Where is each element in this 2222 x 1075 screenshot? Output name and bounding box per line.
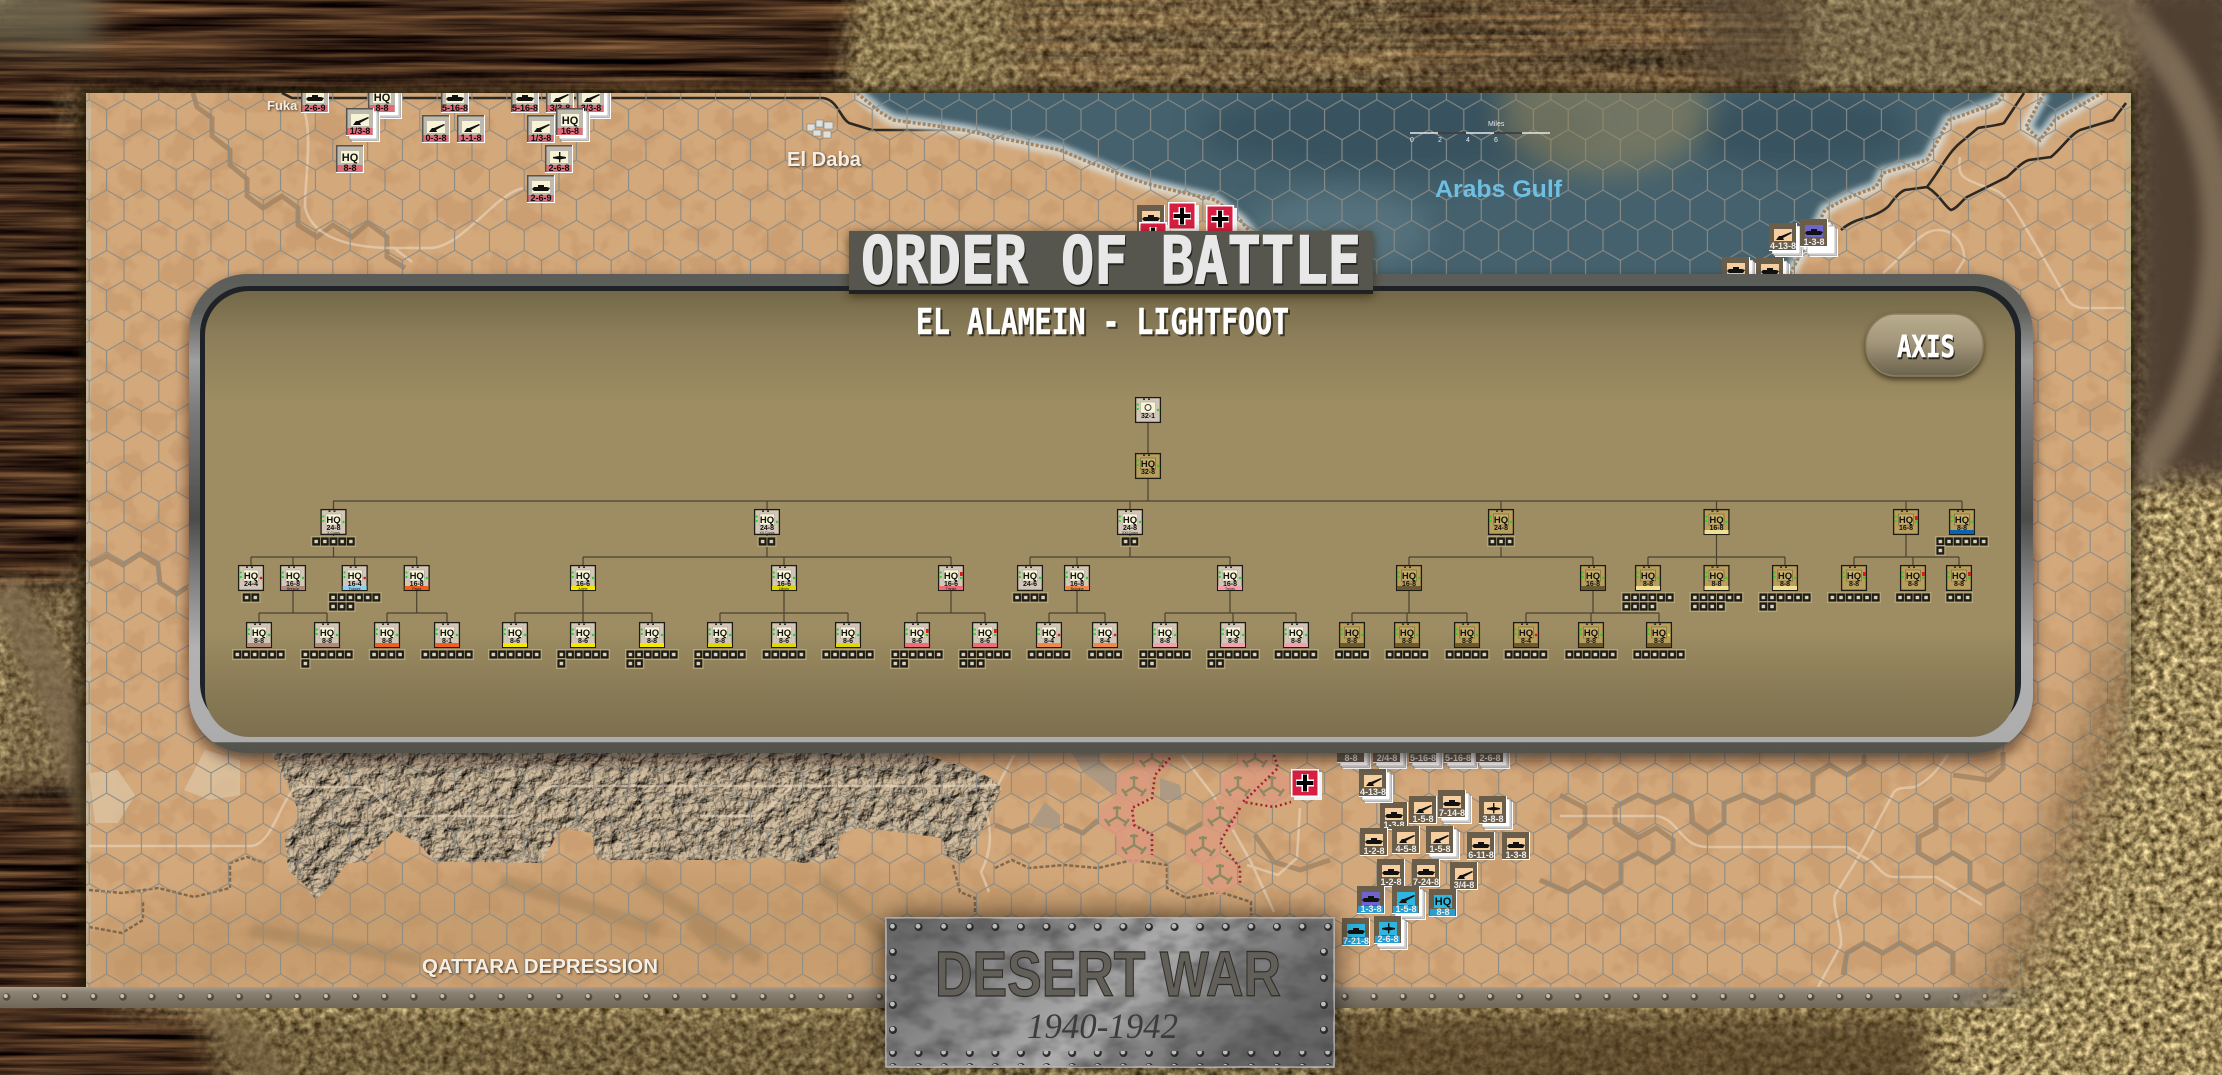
164th division: 16-8 xyxy=(1709,525,1724,532)
rough terrain xyxy=(270,750,1002,900)
Bologna division xyxy=(1065,566,1089,591)
map counters: front line group: 1-3-8 xyxy=(1505,850,1527,860)
Ariete regiment: 8-8 xyxy=(647,638,657,645)
X Corps: 24-8 xyxy=(326,525,341,532)
15th Panzer regiment xyxy=(1444,623,1490,660)
plaque title: DESERT WAR xyxy=(935,938,1281,1010)
map counters: front line group: 8-8 xyxy=(1344,753,1358,763)
map counters: front line group: 1-2-8 xyxy=(1380,877,1402,887)
Pavia regiment xyxy=(420,623,474,660)
164th regiment xyxy=(1621,566,1675,612)
map counters: north-west group: 1-1-8 xyxy=(460,133,482,143)
XX Corps xyxy=(755,510,779,547)
plaque rivets xyxy=(886,920,1334,1065)
map counters: front line group xyxy=(1291,735,1530,950)
Littorio division: HQ xyxy=(777,571,791,582)
Folgore division: Folgore xyxy=(349,587,361,591)
164th regiment xyxy=(1758,566,1812,612)
Trento regiment: 8-8 xyxy=(1160,638,1170,645)
Littorio division xyxy=(772,566,796,591)
Bologna regiment xyxy=(1026,623,1072,660)
map counters: front line group: 7-24-8 xyxy=(1413,877,1439,887)
Folgore division: 16-4 xyxy=(348,581,362,588)
164th division xyxy=(1704,510,1729,534)
Ariete regiment: HQ xyxy=(508,628,522,639)
X Corps xyxy=(311,510,356,547)
Bologna regiment: HQ xyxy=(1098,628,1112,639)
Trento division: HQ xyxy=(1223,571,1237,582)
Pavia regiment xyxy=(369,623,405,660)
X Corps: HQ xyxy=(326,515,341,526)
Littorio regiment: HQ xyxy=(777,628,791,639)
15th Panzer division xyxy=(1397,566,1421,590)
Brescia division: Brescia xyxy=(287,587,299,591)
depression sand xyxy=(86,872,1130,982)
Littorio regiment: HQ xyxy=(713,628,727,639)
German Panzer corps: HQ xyxy=(1494,515,1508,526)
dark escarpment edges xyxy=(89,857,1251,933)
90th Light division: HQ xyxy=(1899,515,1913,526)
map counters: north-east group: 1-3-8 xyxy=(1803,237,1825,247)
XXI Corps unit: HQ xyxy=(1023,571,1037,582)
map counters: front line group: 7-21-8 xyxy=(1343,936,1369,946)
15th Panzer regiment xyxy=(1384,623,1430,660)
90th Light regiment: 8-8 xyxy=(1908,581,1918,588)
map drop shadow xyxy=(78,88,2136,993)
Ariete division: HQ xyxy=(576,571,590,582)
Trieste regiment: 8-6 xyxy=(912,638,922,645)
Ariete regiment: 8-6 xyxy=(578,638,588,645)
map counters: north-west group: 2-6-9 xyxy=(304,103,326,113)
Littorio division: 16-6 xyxy=(777,581,791,588)
Folgore division: HQ xyxy=(348,571,362,582)
Trieste regiment xyxy=(958,623,1012,669)
XXI Corps: 24-8 xyxy=(1123,525,1137,532)
map counters: north-west group: 3/3-8 xyxy=(550,103,570,113)
Trieste division: HQ xyxy=(944,571,958,582)
roads xyxy=(282,93,2126,230)
Brescia regiment: 8-8 xyxy=(322,638,332,645)
21st Panzer division: HQ xyxy=(1586,571,1600,582)
map counters: north-west group: 0-3-8 xyxy=(425,133,447,143)
Trento regiment: HQ xyxy=(1226,628,1240,639)
Trento regiment xyxy=(1138,623,1192,669)
map counters: front line group: 4-5-8 xyxy=(1395,844,1417,854)
map counters: front line group: 1-5-8 xyxy=(1395,904,1417,914)
map counters: front line group: 3/4-8 xyxy=(1454,880,1474,890)
map counters: north-west group: 8-8 xyxy=(343,163,357,173)
Pavia division: HQ xyxy=(410,571,424,582)
Bologna division: Bologna xyxy=(1071,587,1083,591)
Brescia regiment: HQ xyxy=(252,628,266,639)
15th Panzer regiment: HQ xyxy=(1400,628,1414,639)
button: Axis: AXIS xyxy=(1897,330,1955,365)
scale bar: 2 xyxy=(1438,137,1442,144)
map counters: front line group: 1-2-8 xyxy=(1363,846,1385,856)
Pavia division: Pavia xyxy=(412,587,421,591)
Littorio regiment: 8-6 xyxy=(779,638,789,645)
90th Light regiment: 8-8 xyxy=(1954,581,1964,588)
desert tracks xyxy=(89,113,2126,987)
panel metal frame xyxy=(189,274,2033,753)
21st Panzer division: 16-8 xyxy=(1586,581,1600,588)
XXI Corps: HQ xyxy=(1123,515,1137,526)
Littorio division: Littorio xyxy=(779,587,789,591)
21st Panzer regiment xyxy=(1632,623,1686,660)
Littorio regiment: 8-8 xyxy=(715,638,725,645)
21st Panzer regiment: 8-4 xyxy=(1521,638,1531,645)
Bologna regiment: 8-4 xyxy=(1044,638,1054,645)
Trieste regiment xyxy=(890,623,944,669)
15th Panzer regiment: HQ xyxy=(1345,628,1359,639)
15th Panzer regiment: 8-8 xyxy=(1402,638,1412,645)
label: El Daba: El Daba xyxy=(787,149,862,171)
org chart xyxy=(232,398,1989,669)
15th Panzer regiment xyxy=(1334,623,1370,660)
Brescia regiment: HQ xyxy=(320,628,334,639)
Bologna regiment xyxy=(1087,623,1123,660)
X Corps unit xyxy=(239,566,263,603)
scale bar: 0 xyxy=(1410,137,1414,144)
Ariete regiment xyxy=(556,623,610,669)
XXI Corps: XXI Corps xyxy=(1122,531,1138,535)
map counters: north-west group: HQ xyxy=(342,152,359,164)
Brescia division: HQ xyxy=(286,571,300,582)
21st Panzer division xyxy=(1581,566,1605,590)
Folgore division xyxy=(328,566,382,612)
Ariete division xyxy=(571,566,595,591)
21st Panzer regiment: 8-8 xyxy=(1586,638,1596,645)
org chart connector lines xyxy=(251,423,1962,622)
Brescia regiment xyxy=(300,623,354,669)
Trento regiment xyxy=(1206,623,1260,669)
Ramcke brigade xyxy=(1935,510,1989,556)
Littorio regiment xyxy=(761,623,807,660)
hex grid xyxy=(86,93,2131,987)
Brescia division: 16-8 xyxy=(286,581,300,588)
Trieste division xyxy=(939,566,963,591)
X Corps: X Corps xyxy=(327,531,340,535)
Pavia division xyxy=(404,566,429,591)
Pavia regiment: 8-1 xyxy=(442,638,452,645)
15th Panzer regiment: 8-8 xyxy=(1347,638,1357,645)
map counters: front line group: 7-14-8 xyxy=(1439,808,1465,818)
map counters: front line group: 2/4-8 xyxy=(1377,753,1397,763)
scale bar: 6 xyxy=(1494,137,1498,144)
15th Panzer regiment: 8-8 xyxy=(1462,638,1472,645)
map counters: coast group behind title xyxy=(1137,202,1237,253)
21st Panzer regiment xyxy=(1564,623,1618,660)
90th Light division: 16-8 xyxy=(1899,525,1913,532)
German Panzer corps: 24-8 xyxy=(1494,525,1508,532)
90th Light regiment xyxy=(1827,566,1881,603)
21st Panzer regiment: HQ xyxy=(1584,628,1598,639)
X Corps unit: HQ xyxy=(244,571,258,582)
XX Corps: HQ xyxy=(760,515,774,526)
Ariete division: 16-6 xyxy=(576,581,590,588)
label: Arabs Gulf: Arabs Gulf xyxy=(1435,176,1563,203)
X Corps unit: 24-4 xyxy=(244,581,258,588)
164th regiment xyxy=(1690,566,1744,612)
Trento regiment: 8-8 xyxy=(1291,638,1301,645)
Brescia regiment xyxy=(232,623,286,660)
panel: order of battle xyxy=(189,224,2033,753)
fortified hexes xyxy=(1100,738,1291,895)
scale bar: Miles xyxy=(1488,121,1505,128)
15th Panzer regiment: HQ xyxy=(1460,628,1474,639)
map terrain base xyxy=(86,93,2131,987)
Trieste regiment: HQ xyxy=(978,628,992,639)
title bar: ORDER OF BATTLE xyxy=(861,224,1361,299)
XX Corps: 24-8 xyxy=(760,525,774,532)
Bologna regiment: 8-4 xyxy=(1100,638,1110,645)
Ariete division: Ariete xyxy=(578,587,588,591)
21st Panzer regiment xyxy=(1503,623,1549,660)
Littorio regiment: HQ xyxy=(841,628,855,639)
metal rail xyxy=(0,987,2222,1008)
21st Panzer regiment: 8-8 xyxy=(1654,638,1664,645)
sea: Arabs Gulf xyxy=(857,85,2102,274)
Littorio regiment xyxy=(821,623,875,660)
90th Light regiment: HQ xyxy=(1847,571,1861,582)
Brescia regiment: 8-8 xyxy=(254,638,264,645)
Littorio regiment xyxy=(693,623,747,669)
Trento regiment: HQ xyxy=(1158,628,1172,639)
German Panzer corps xyxy=(1487,510,1515,547)
21st Panzer regiment: HQ xyxy=(1652,628,1666,639)
scale bar: 4 xyxy=(1466,137,1470,144)
map counters: north-west group: 8-8 xyxy=(375,103,389,113)
map counters: front line group: 8-8 xyxy=(1436,907,1450,917)
XXI Corps xyxy=(1118,510,1142,547)
Littorio regiment: 8-6 xyxy=(843,638,853,645)
XXI Corps unit: 24-6 xyxy=(1023,581,1037,588)
icon: El Daba town xyxy=(807,120,833,138)
label: Qattara Depression: QATTARA DEPRESSION xyxy=(422,956,658,978)
map counters: front line group: 3-8-8 xyxy=(1482,814,1504,824)
map counters: north-west group: HQ xyxy=(374,92,391,104)
Trento division: Trento xyxy=(1225,587,1235,591)
map counters: front line group: 5-16-8 xyxy=(1445,753,1471,763)
button: Axis xyxy=(1866,314,1983,376)
map counters: north-west group: 16-8 xyxy=(561,126,579,136)
map counters: front line group: HQ xyxy=(1435,896,1452,908)
90th Light regiment xyxy=(1945,566,1973,603)
Trento regiment xyxy=(1273,623,1319,660)
Ramcke brigade: HQ xyxy=(1955,515,1969,526)
90th Light regiment: 8-8 xyxy=(1849,581,1859,588)
map counters: north-east group: 4-13-8 xyxy=(1770,241,1796,251)
map counters: front line group: 5-16-8 xyxy=(1410,753,1436,763)
panel background xyxy=(205,291,2015,737)
map counters: front line group: 2-6-8 xyxy=(1377,934,1399,944)
164th division: HQ xyxy=(1709,515,1724,526)
map counters: north-west group: HQ xyxy=(562,115,579,127)
map counters: front line group: 2-6-8 xyxy=(1479,753,1501,763)
Brescia division xyxy=(281,566,305,591)
map counters: front line group: 1-3-8 xyxy=(1383,820,1405,830)
subtitle: EL ALAMEIN - LIGHTFOOT xyxy=(916,302,1289,343)
Trieste regiment: HQ xyxy=(910,628,924,639)
Bologna regiment: HQ xyxy=(1042,628,1056,639)
map counters: north-west group: 1/3-8 xyxy=(350,126,370,136)
Trieste division: 16-6 xyxy=(944,581,958,588)
Ariete regiment: 8-6 xyxy=(510,638,520,645)
90th Light regiment: HQ xyxy=(1906,571,1920,582)
Bologna division: HQ xyxy=(1070,571,1084,582)
Ariete regiment xyxy=(625,623,679,669)
map counters: north-west group: 2-6-9 xyxy=(530,193,552,203)
90th Light division xyxy=(1894,510,1918,534)
Ariete regiment: HQ xyxy=(645,628,659,639)
90th Light regiment: HQ xyxy=(1952,571,1966,582)
map counters: north-west group: 1/3-8 xyxy=(531,133,551,143)
Ariete regiment: HQ xyxy=(576,628,590,639)
map counters: north-east group xyxy=(1722,219,1838,292)
Trento regiment: HQ xyxy=(1289,628,1303,639)
164th regiment: HQ xyxy=(1709,571,1724,582)
164th regiment: 8-8 xyxy=(1711,581,1722,588)
map counters: front line group: 1-5-8 xyxy=(1429,844,1451,854)
164th regiment: 8-8 xyxy=(1780,581,1790,588)
rocky patches xyxy=(1030,750,1182,830)
top command counter xyxy=(1136,398,1160,422)
army HQ counter: HQ xyxy=(1141,459,1155,470)
escarpment ridges xyxy=(90,93,2005,975)
Trieste division: Trieste xyxy=(946,587,956,591)
Pavia regiment: HQ xyxy=(380,628,394,639)
map counters: front line group: 6-11-8 xyxy=(1468,850,1494,860)
Ramcke brigade: 8-8 xyxy=(1957,525,1967,532)
Pavia division: 16-8 xyxy=(410,581,424,588)
21st Panzer regiment: HQ xyxy=(1519,628,1533,639)
Pavia regiment: HQ xyxy=(440,628,454,639)
map counters: front line group: 4-13-8 xyxy=(1360,787,1386,797)
map counters: north-west group: 3/3-8 xyxy=(581,103,601,113)
map counters: front line group: 1-5-8 xyxy=(1412,814,1434,824)
Trento regiment: 8-8 xyxy=(1228,638,1238,645)
map counters: north-west group: 2-6-8 xyxy=(548,163,570,173)
map counters: north-west group xyxy=(301,85,611,203)
XXI Corps unit xyxy=(1012,566,1048,603)
164th regiment: HQ xyxy=(1778,571,1792,582)
scale bar xyxy=(1410,121,1550,144)
Trento division xyxy=(1218,566,1242,591)
Pavia regiment: 8-8 xyxy=(382,638,392,645)
map counters: north-west group: 5-16-8 xyxy=(442,103,468,113)
164th regiment: HQ xyxy=(1641,571,1655,582)
army HQ counter xyxy=(1136,454,1160,478)
map counters: front line group: 1-3-8 xyxy=(1360,904,1382,914)
Bologna division: 16-8 xyxy=(1070,581,1084,588)
map counters: north-west group: 5-16-8 xyxy=(512,103,538,113)
Trieste regiment: 8-6 xyxy=(980,638,990,645)
plaque years: 1940-1942 xyxy=(1027,1006,1178,1046)
XX Corps: XX Corps xyxy=(760,531,775,535)
15th Panzer division: HQ xyxy=(1402,571,1416,582)
15th Panzer division: 16-8 xyxy=(1402,581,1416,588)
90th Light regiment xyxy=(1895,566,1931,603)
army HQ counter: 32-8 xyxy=(1141,469,1155,476)
plaque: Desert War xyxy=(886,918,1334,1067)
haze over sea xyxy=(1489,93,1720,185)
Trento division: 16-8 xyxy=(1223,581,1237,588)
label: Fuka: Fuka xyxy=(267,98,298,113)
Ariete regiment xyxy=(488,623,542,660)
top command counter: 32-1 xyxy=(1141,413,1155,420)
164th regiment: 8-8 xyxy=(1643,581,1653,588)
